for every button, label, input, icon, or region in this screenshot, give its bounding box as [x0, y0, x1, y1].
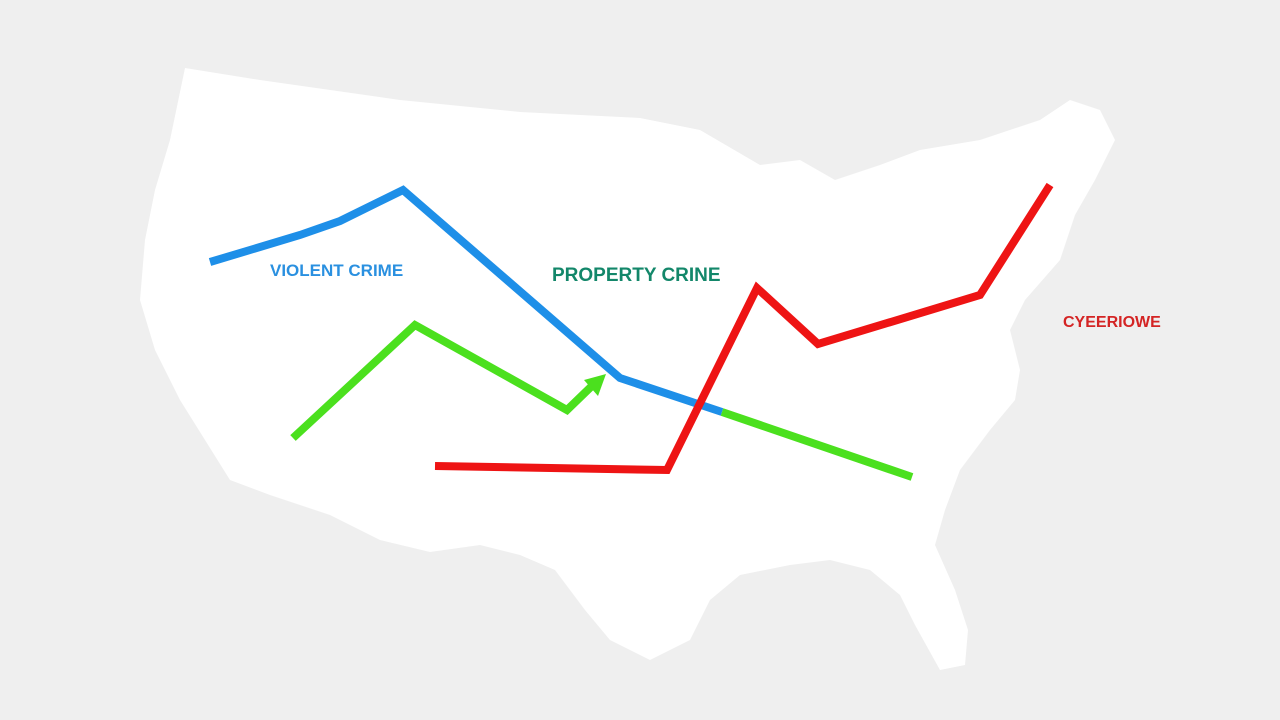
map: US silhouette — [140, 68, 1115, 670]
label: property crime: PROPERTY CRINE — [552, 265, 721, 286]
line: violent crime (blue) — [210, 190, 722, 412]
line: property crime (green) — [293, 325, 912, 477]
label: cybercrime: CYEERIOWE — [1063, 314, 1161, 331]
arrow head: green — [584, 374, 606, 396]
label: violent crime: VIOLENT CRIME — [270, 261, 403, 280]
line: cybercrime (red) — [435, 185, 1050, 470]
